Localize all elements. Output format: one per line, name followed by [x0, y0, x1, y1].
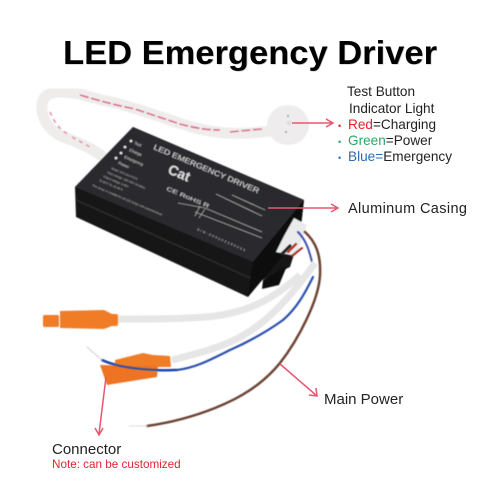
- label: test button and indicator light: Blue=Emergency: [348, 149, 452, 164]
- label: test button and indicator light: •: [338, 153, 341, 163]
- casing printed text: Test: [134, 140, 143, 148]
- label: test button and indicator light: [338, 84, 452, 164]
- wires: [87, 232, 320, 426]
- ribbon cable and test button: [42, 92, 309, 157]
- orange connector 1: [43, 310, 118, 329]
- label: test button and indicator light: Test Button: [347, 84, 415, 99]
- casing printed text: Power: [118, 160, 131, 170]
- label: test button and indicator light: •: [338, 137, 341, 147]
- casing printed text: CE RoHS R: [165, 186, 210, 210]
- casing printed text: This driver is suitable for all LED lamps with external driver: [92, 183, 163, 217]
- label: test button and indicator light: Green=Power: [348, 133, 433, 148]
- label: main power: Main Power: [324, 391, 403, 408]
- driver casing: [75, 127, 307, 297]
- orange connector 2: [100, 353, 171, 385]
- casing printed text: Emergency: [124, 154, 144, 167]
- icon: test button disc: [267, 105, 309, 145]
- arrow: aluminum casing: [268, 204, 338, 212]
- label: test button and indicator light: Indicator Light: [349, 101, 435, 116]
- casing printed text: Tc:60°C Ta:-20-40°C: [99, 178, 124, 192]
- casing printed text: Output voltage: 3-48V: [103, 174, 129, 189]
- casing printed text: Model: FAT-LED-P1C3: [111, 166, 139, 181]
- casing printed text: S/N:200502190055: [197, 227, 246, 252]
- terminal block: [276, 218, 307, 256]
- title: LED Emergency Driver: [64, 35, 438, 72]
- casing printed text: Charge: [129, 147, 143, 157]
- label: aluminum casing: Aluminum Casing: [348, 201, 467, 217]
- note: can be customized: Note: can be customized: [52, 458, 181, 471]
- label: connector: Connector: [52, 441, 121, 458]
- casing printed text: Input voltage: 100-240V 50-60Hz: [107, 170, 147, 190]
- arrow: connector: [95, 377, 106, 435]
- arrow: test button: [292, 119, 333, 127]
- casing printed text: [92, 140, 261, 252]
- casing printed text: LED EMERGENCY DRIVER: [152, 143, 261, 196]
- blue wire over connector: [102, 360, 177, 370]
- black plug: [262, 266, 287, 289]
- label: test button and indicator light: Red=Charging: [348, 117, 436, 132]
- title: LED Emergency Driver: [63, 34, 437, 71]
- arrow: main power: [280, 364, 317, 396]
- casing printed text: Cat: [166, 161, 193, 185]
- label: test button and indicator light: •: [338, 121, 341, 131]
